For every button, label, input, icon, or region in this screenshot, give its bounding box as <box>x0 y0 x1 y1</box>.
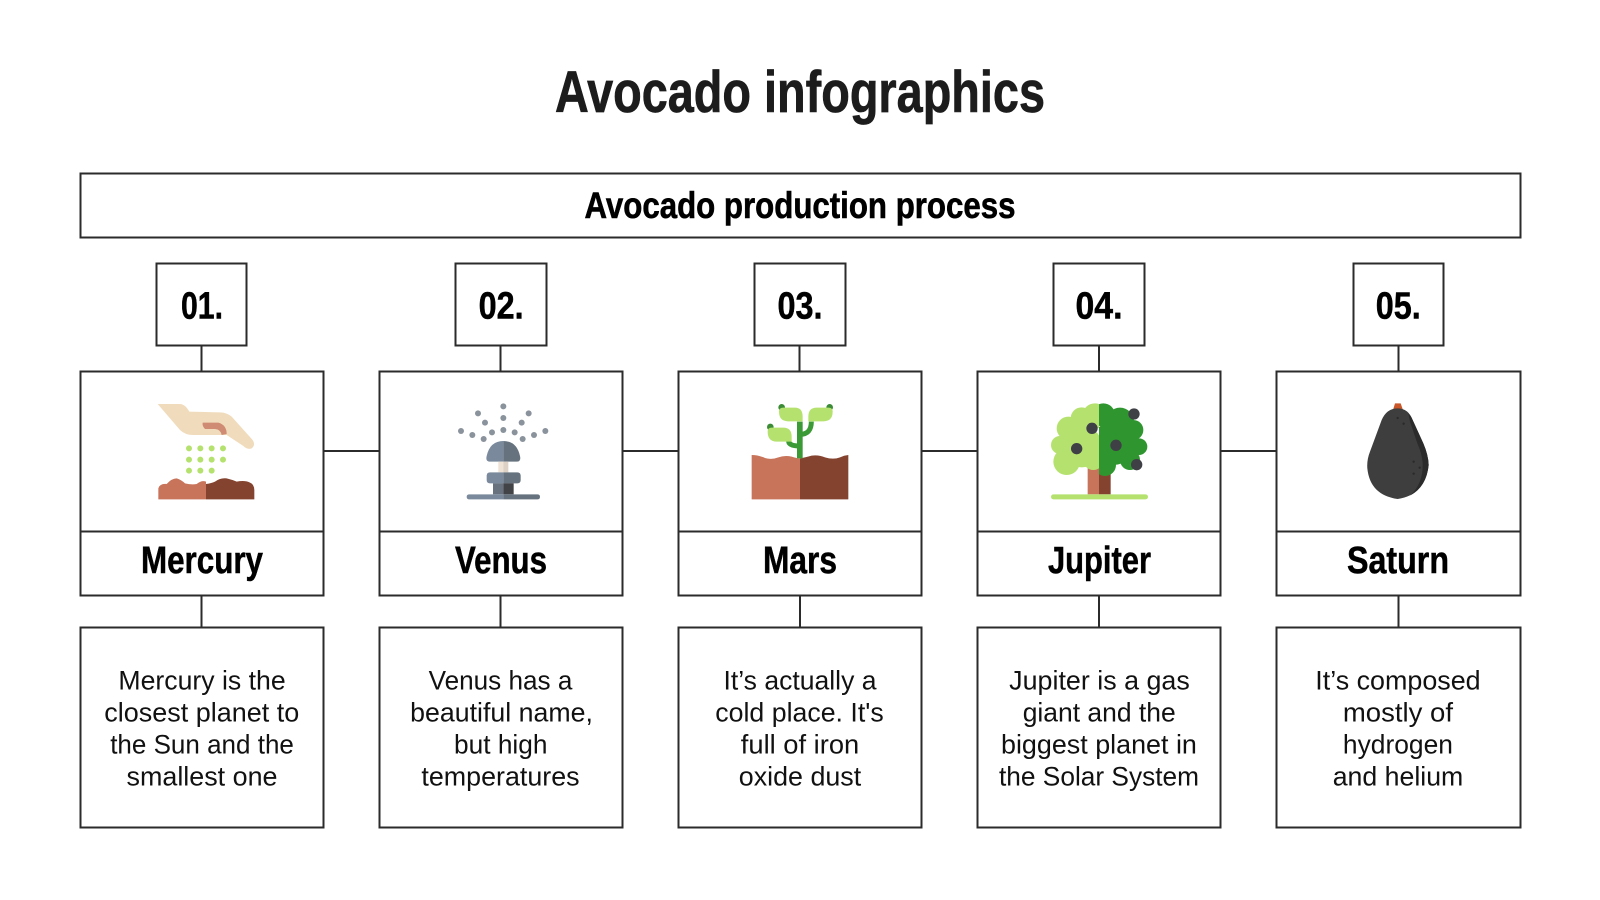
description box Saturn <box>1276 628 1520 828</box>
description box Saturn: and helium <box>1333 761 1463 791</box>
number box 04 <box>1054 264 1144 346</box>
label box Venus <box>380 532 622 596</box>
icon box step 3 <box>678 372 922 532</box>
label box Mercury <box>80 532 324 596</box>
description box Jupiter <box>978 628 1220 828</box>
number box 03 <box>754 264 846 346</box>
icon: sprout in soil <box>752 404 848 499</box>
panel: step 4 Jupiter <box>978 264 1220 828</box>
description box Mercury: smallest one <box>126 761 278 791</box>
number box 04: 04. <box>1076 285 1122 327</box>
description box Jupiter: giant and the <box>1023 697 1176 727</box>
description box Mercury <box>80 628 324 828</box>
description box Jupiter: the Solar System <box>999 761 1199 791</box>
icon box step 5 <box>1276 372 1520 532</box>
panel: step 3 Mars <box>678 264 922 828</box>
number box 02 <box>456 264 546 346</box>
connector lines step 4 <box>1098 345 1100 627</box>
horizontal connectors between steps <box>324 450 1276 452</box>
description box Jupiter: biggest planet in <box>1001 729 1197 759</box>
description box Saturn: It’s composed <box>1315 665 1481 695</box>
label box Saturn: Saturn <box>1347 540 1449 582</box>
description box Venus: beautiful name, <box>410 697 593 727</box>
label box Venus: Venus <box>455 540 547 582</box>
label box Mercury: Mercury <box>141 540 263 582</box>
number box 03: 03. <box>778 285 822 327</box>
description box Mars: cold place. It's <box>715 697 884 727</box>
label box Mars <box>678 532 922 596</box>
icon box step 1 <box>80 372 324 532</box>
header bar: Avocado production process: Avocado production process <box>584 185 1016 226</box>
number box 02: 02. <box>479 285 524 327</box>
icon box step 4 <box>978 372 1220 532</box>
description box Venus: but high <box>454 729 548 759</box>
description box Saturn: mostly of <box>1343 697 1454 727</box>
description box Mercury: the Sun and the <box>110 729 294 759</box>
label box Saturn <box>1276 532 1520 596</box>
description box Venus: Venus has a <box>429 665 573 695</box>
description box Venus <box>380 628 622 828</box>
icon: sprinkler <box>458 403 548 499</box>
icon: avocado fruit <box>1367 403 1429 499</box>
panel: step 2 Venus <box>380 264 622 828</box>
description box Mars: full of iron <box>741 729 859 759</box>
label box Mars: Mars <box>763 540 837 582</box>
icon: hand sowing seeds <box>158 404 254 499</box>
icon: avocado tree <box>1051 403 1148 499</box>
description box Mars: It’s actually a <box>724 665 877 695</box>
connector lines step 3 <box>798 345 801 627</box>
description box Saturn: hydrogen <box>1343 729 1453 759</box>
panel: step 5 Saturn <box>1276 264 1520 828</box>
description box Mars: oxide dust <box>739 761 862 791</box>
panel: step 1 Mercury <box>80 264 324 828</box>
label box Jupiter: Jupiter <box>1048 540 1151 582</box>
description box Mercury: closest planet to <box>104 697 299 727</box>
number box 05: 05. <box>1376 285 1421 327</box>
description box Jupiter: Jupiter is a gas <box>1009 665 1190 695</box>
number box 01 <box>156 264 246 346</box>
label box Jupiter <box>978 532 1220 596</box>
description box Mars <box>678 628 922 828</box>
header bar: Avocado production process <box>80 174 1520 238</box>
number box 05 <box>1354 264 1444 346</box>
icon box step 2 <box>380 372 622 532</box>
description box Mercury: Mercury is the <box>118 665 286 695</box>
connector lines step 2 <box>500 345 502 627</box>
connector lines step 5 <box>1398 345 1400 627</box>
connector lines step 1 <box>200 345 202 627</box>
description box Venus: temperatures <box>421 761 580 791</box>
number box 01: 01. <box>181 285 223 327</box>
title: Avocado infographics <box>555 60 1045 125</box>
